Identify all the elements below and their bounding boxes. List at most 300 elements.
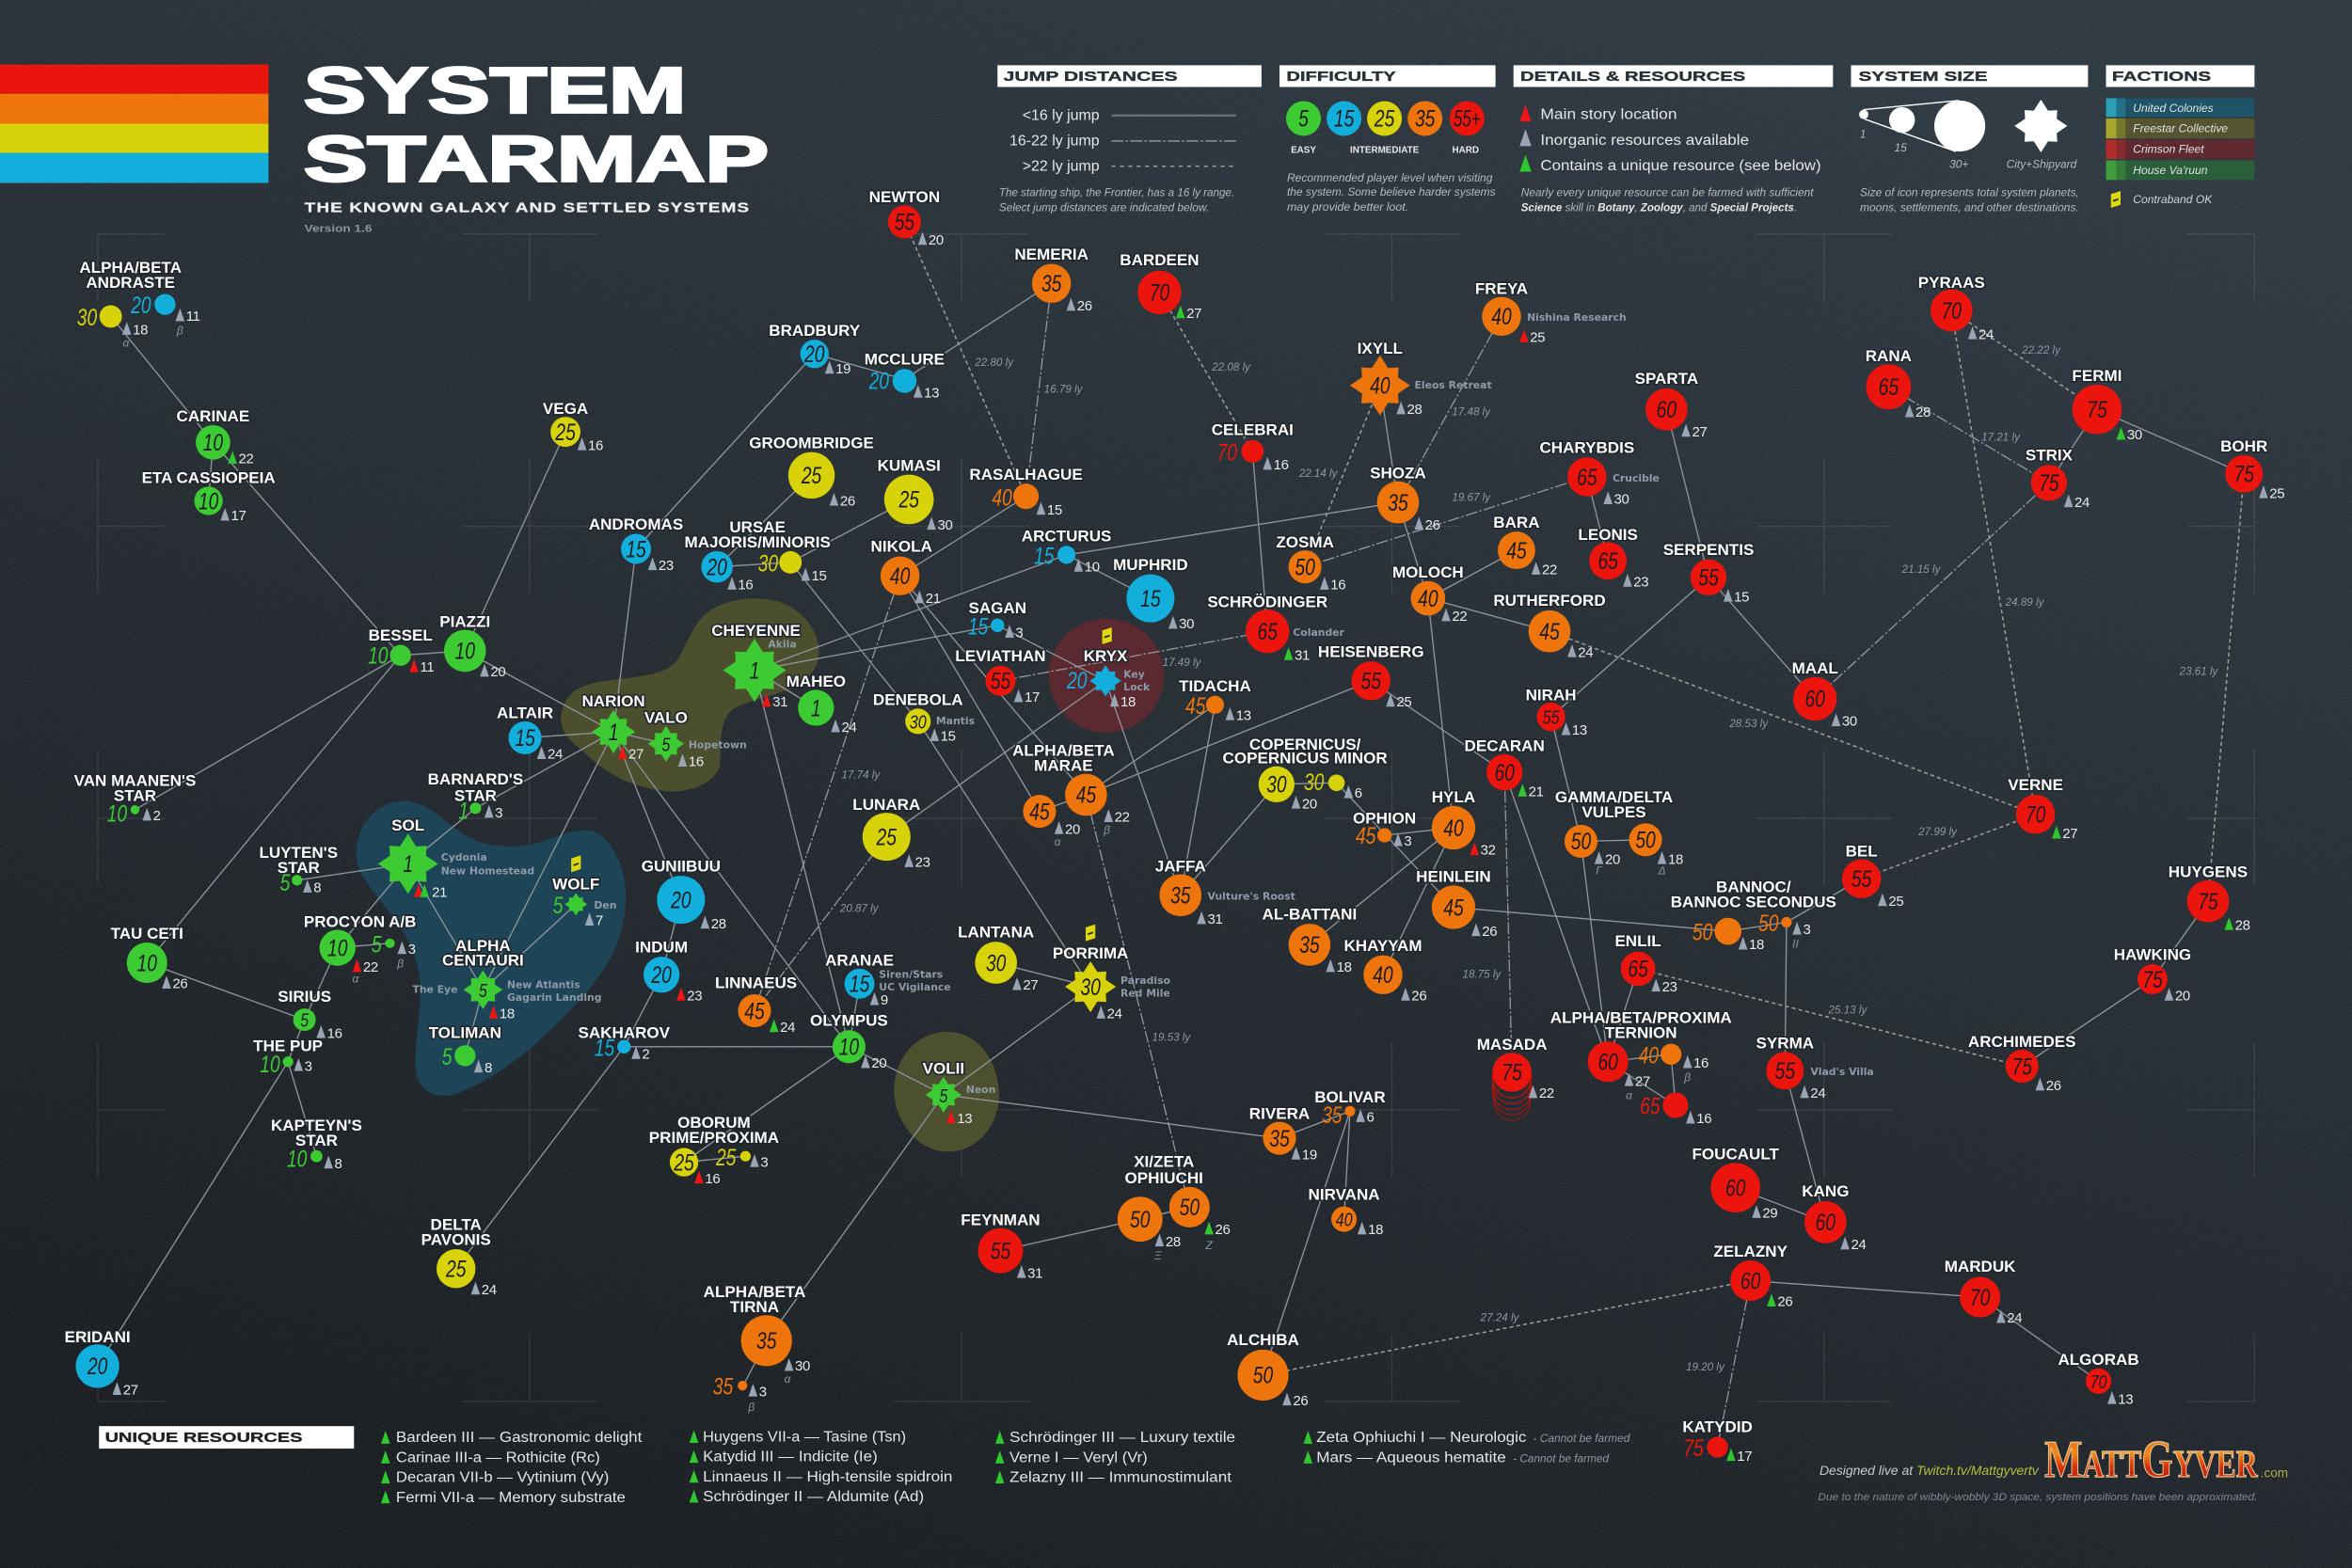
- system: Alpha/Beta/Proxima Ternion: 16: [1693, 1055, 1708, 1071]
- system: Cheyenne: 31: [772, 694, 787, 710]
- panel: unique resources: Schrödinger III — Luxury textile: [1009, 1430, 1235, 1446]
- system: Andromas: [589, 515, 683, 574]
- jump distance labels: 19.53 ly: [1152, 1031, 1191, 1043]
- system: Kapteyn's Star: 10: [287, 1146, 308, 1172]
- jump routes 16 to 22 ly: [755, 283, 2049, 1447]
- system: Alpha/Beta Tirna: TIRNA: [730, 1298, 779, 1316]
- system: Ursae Majoris/Minoris: MAJORIS/MINORIS: [684, 533, 831, 551]
- system: Decaran: [1465, 737, 1545, 800]
- system: Kumasi: 30: [937, 517, 953, 533]
- system: Hyla: HYLA: [1432, 788, 1475, 806]
- system: Tau Ceti: 26: [172, 976, 187, 992]
- system: Hawking: [2114, 945, 2191, 1004]
- system: Rivera: RIVERA: [1249, 1104, 1310, 1122]
- system: Bara: 45: [1506, 538, 1527, 563]
- system: Alpha/Beta Marae: MARAE: [1034, 756, 1093, 774]
- system: Alpha/Beta Tirna: α: [785, 1372, 792, 1386]
- system: Celebrai: 16: [1274, 457, 1289, 473]
- system: Linnaeus: 24: [780, 1020, 795, 1036]
- system: Shoza: SHOZA: [1370, 465, 1426, 483]
- system: Kang: 24: [1851, 1237, 1866, 1253]
- system: Shoza: 26: [1425, 517, 1440, 533]
- panel: jump distances: Select jump distances are indicated below.: [999, 201, 1209, 214]
- jump distance labels: 21.15 ly: [1901, 563, 1942, 576]
- panel: difficulty: EASY: [1291, 146, 1316, 156]
- system: Freya: FREYA: [1475, 279, 1528, 297]
- system: Kapteyn's Star: KAPTEYN'S: [271, 1117, 362, 1134]
- system: Bannoc/Bannoc Secondus: BANNOC/: [1716, 879, 1791, 896]
- system: Bradbury: BRADBURY: [769, 322, 861, 340]
- system: Heisenberg: [1318, 642, 1424, 710]
- system: Alpha Centauri: New Atlantis: [507, 979, 580, 991]
- system: Sirius: 16: [327, 1025, 342, 1041]
- system: The Pup: [253, 1037, 323, 1078]
- system: Serpentis: SERPENTIS: [1663, 541, 1754, 559]
- system: Delta Pavonis: PAVONIS: [421, 1230, 491, 1248]
- jump distance labels: 22.14 ly: [1298, 467, 1339, 480]
- system: Schrödinger: SCHRÖDINGER: [1207, 594, 1327, 611]
- system: Archimedes: ARCHIMEDES: [1968, 1033, 2076, 1051]
- system: Alpha/Beta Marae: ALPHA/BETA: [1012, 742, 1115, 760]
- system: Maheo: 1: [811, 695, 821, 721]
- panel: unique resources: Schrödinger II — Aldumite (Ad): [703, 1489, 924, 1505]
- system: Bradbury: 19: [835, 361, 850, 377]
- system: Nikola: [871, 538, 941, 607]
- system: Nirvana: 40: [1336, 1209, 1353, 1230]
- jump distance labels: 19.20 ly: [1686, 1361, 1725, 1373]
- system: Rana: RANA: [1866, 347, 1912, 365]
- system: Denebola: [873, 690, 975, 745]
- system: Valo: 5: [661, 734, 671, 755]
- system: McClure: 13: [924, 385, 939, 401]
- panel: difficulty: 25: [1374, 105, 1395, 132]
- system: Bolivar: 35: [1322, 1102, 1343, 1129]
- system: Xi/Zeta Ophiuchi: Ξ: [1153, 1249, 1163, 1262]
- system: Schrödinger: 65: [1258, 619, 1279, 645]
- system: Andromas: 15: [626, 536, 646, 562]
- panel: factions: [2106, 65, 2254, 208]
- system: Aranae: ARANAE: [825, 952, 894, 970]
- system: Pyraas: PYRAAS: [1918, 274, 1985, 292]
- system: Kang: 60: [1816, 1210, 1836, 1236]
- system: Huygens: 28: [2235, 917, 2250, 933]
- system: Indum: INDUM: [635, 938, 688, 956]
- system: Porrima: 24: [1107, 1006, 1122, 1022]
- system: Tau Ceti: [111, 925, 187, 992]
- system: Alpha/Beta/Proxima Ternion: 65: [1640, 1093, 1661, 1119]
- system: Archimedes: [1968, 1033, 2076, 1094]
- system: Ophion: 45: [1356, 822, 1376, 848]
- system: Xi/Zeta Ophiuchi: [1118, 1152, 1230, 1262]
- panel: details and resources: Inorganic resources available: [1540, 133, 1749, 149]
- system: Zosma: ZOSMA: [1276, 533, 1334, 551]
- system: Bel: 55: [1851, 866, 1872, 893]
- system: Olympus: 10: [839, 1034, 860, 1060]
- system: Sparta: 60: [1657, 397, 1677, 423]
- system: Ursae Majoris/Minoris: 16: [738, 578, 753, 594]
- panel: factions: United Colonies: [2133, 102, 2214, 115]
- system: Rasalhague: [969, 466, 1083, 518]
- system: Muphrid: 15: [1140, 586, 1161, 611]
- system: Van Maanen's Star: 2: [153, 808, 161, 824]
- system: Procyon A/B: 5: [372, 931, 382, 958]
- system: Newton: 20: [929, 232, 944, 248]
- system: Zelazny: [1713, 1243, 1792, 1310]
- system: Alpha/Beta Andraste: 18: [133, 323, 148, 339]
- jump distance labels: 22.08 ly: [1211, 361, 1251, 373]
- system: Alpha/Beta Andraste: β: [176, 325, 183, 338]
- system: Tau Ceti: TAU CETI: [111, 925, 183, 942]
- system: Narion: NARION: [581, 692, 645, 710]
- system: Huygens: HUYGENS: [2169, 863, 2248, 881]
- system: Kang: [1802, 1182, 1866, 1253]
- system: Lunara: 23: [915, 855, 930, 871]
- system: Groombridge: 25: [801, 463, 822, 489]
- system: Bannoc/Bannoc Secondus: 50: [1758, 911, 1779, 937]
- system: Van Maanen's Star: VAN MAANEN'S: [74, 771, 196, 789]
- system: Bessel: 11: [420, 659, 434, 675]
- system: Bel: [1842, 842, 1903, 910]
- system: Al-Battani: [1263, 905, 1357, 975]
- system: Gamma/Delta Vulpes: 18: [1668, 851, 1683, 867]
- system: Rivera: 19: [1302, 1147, 1317, 1163]
- system: Toliman: 5: [442, 1044, 453, 1070]
- panel: unique resources: Huygens VII-a — Tasine (Tsn): [703, 1430, 906, 1446]
- system: Groombridge: [749, 435, 874, 509]
- panel: details and resources: Contains a unique resource (see below): [1540, 158, 1821, 174]
- system: Sol: [378, 816, 534, 900]
- panel: unique resources: Zeta Ophiuchi I — Neurologic: [1316, 1430, 1526, 1446]
- system: Bara: 22: [1542, 562, 1557, 578]
- system: The Pup: THE PUP: [253, 1037, 323, 1055]
- system: Luyten's Star: LUYTEN'S: [259, 844, 338, 862]
- system: Lunara: [852, 796, 930, 871]
- system: Charybdis: CHARYBDIS: [1540, 438, 1634, 456]
- system: Serpentis: [1663, 541, 1754, 605]
- system: Groombridge: GROOMBRIDGE: [749, 435, 874, 452]
- system: Bohr: BOHR: [2220, 437, 2267, 455]
- system: Nirah: 55: [1543, 706, 1560, 728]
- system: Lantana: [958, 923, 1038, 993]
- system: Tidacha: TIDACHA: [1179, 677, 1251, 695]
- system: Leonis: 23: [1633, 574, 1648, 590]
- jump distance labels: 16.79 ly: [1044, 384, 1084, 396]
- system: Muphrid: [1113, 556, 1194, 632]
- jump distance labels: 27.99 ly: [1917, 826, 1958, 838]
- system: Sakharov: SAKHAROV: [578, 1023, 671, 1041]
- jump distance labels: 22.80 ly: [974, 356, 1014, 369]
- system: Eta Cassiopeia: 10: [199, 488, 219, 515]
- panel: system size: 30+: [1949, 158, 1968, 171]
- system: Bessel: [368, 626, 434, 675]
- system: Syrma: SYRMA: [1756, 1034, 1814, 1052]
- system: Enlil: [1614, 932, 1677, 995]
- system: Aranae: Siren/Stars: [879, 968, 943, 980]
- panel: unique resources: UNIQUE RESOURCES: [105, 1431, 303, 1446]
- system: Schrödinger: Colander: [1293, 626, 1345, 639]
- system: Algorab: [2058, 1351, 2139, 1407]
- system: Feynman: FEYNMAN: [961, 1212, 1041, 1229]
- system: Oborum Prime/Proxima: 25: [673, 1149, 694, 1176]
- panel: system size: 1: [1860, 128, 1867, 141]
- system: Alpha/Beta/Proxima Ternion: 40: [1639, 1042, 1660, 1069]
- system: Piazzi: PIAZZI: [439, 612, 490, 630]
- system: Bara: [1493, 514, 1557, 578]
- system: Rasalhague: RASALHAGUE: [969, 466, 1083, 483]
- system: Narion: 27: [628, 747, 644, 763]
- system: Kryx: [1066, 627, 1151, 710]
- system: Alpha/Beta Marae: 20: [1065, 821, 1080, 837]
- system: Muphrid: 30: [1179, 616, 1194, 632]
- system: Freya: Nishina Research: [1527, 311, 1627, 324]
- system: Nirah: NIRAH: [1526, 687, 1577, 705]
- system: Guniibuu: 20: [670, 887, 691, 913]
- system: Nemeria: 26: [1077, 298, 1092, 314]
- system: Kapteyn's Star: STAR: [295, 1132, 338, 1149]
- system: Alpha/Beta Andraste: 20: [130, 293, 151, 319]
- system: Copernicus/Copernicus Minor: 30: [1266, 771, 1287, 798]
- system: Aranae: UC Vigilance: [879, 981, 951, 993]
- system: Kapteyn's Star: [271, 1117, 362, 1172]
- system: Sol: 1: [403, 851, 413, 878]
- system: Arcturus: 10: [1085, 559, 1100, 575]
- system: Oborum Prime/Proxima: 16: [705, 1171, 720, 1187]
- system: Piazzi: 10: [455, 638, 476, 664]
- system: Altair: 15: [515, 725, 535, 752]
- system: Algorab: 13: [2118, 1391, 2133, 1407]
- system: Xi/Zeta Ophiuchi: 50: [1180, 1195, 1200, 1221]
- system: Al-Battani: 18: [1337, 959, 1352, 975]
- system: Luyten's Star: 5: [280, 870, 291, 896]
- system: Ursae Majoris/Minoris: 30: [758, 550, 779, 577]
- system: Hawking: 20: [2175, 988, 2190, 1004]
- system: Strix: 24: [2074, 495, 2090, 511]
- system: Guniibuu: [642, 857, 726, 932]
- system: Ophion: [1353, 809, 1416, 849]
- system: Gamma/Delta Vulpes: Γ: [1596, 863, 1603, 877]
- system: Sirius: [278, 988, 342, 1041]
- system: Alpha/Beta Marae: 45: [1029, 799, 1050, 825]
- panel: factions: Crimson Fleet: [2133, 143, 2204, 156]
- system: Bannoc/Bannoc Secondus: 18: [1749, 937, 1764, 953]
- system: Strix: STRIX: [2026, 446, 2074, 464]
- system: Olympus: OLYMPUS: [810, 1012, 888, 1030]
- system: Porrima: Red Mile: [1120, 987, 1170, 999]
- system: Alpha Centauri: 18: [500, 1006, 515, 1022]
- system: Gamma/Delta Vulpes: 50: [1635, 827, 1656, 853]
- system: Moloch: 40: [1418, 586, 1438, 611]
- panel: details and resources: DETAILS & RESOURCES: [1520, 70, 1746, 85]
- system: Sagan: 3: [1015, 626, 1023, 641]
- system: Alpha/Beta/Proxima Ternion: ALPHA/BETA/PROXIMA: [1550, 1008, 1732, 1026]
- jump distance labels: 20.87 ly: [839, 902, 880, 914]
- system: Alpha Centauri: ALPHA: [455, 937, 511, 955]
- system: Tidacha: [1179, 677, 1251, 723]
- system: Gamma/Delta Vulpes: 50: [1571, 829, 1592, 855]
- system: Gamma/Delta Vulpes: Δ: [1658, 863, 1666, 877]
- system: Ursae Majoris/Minoris: URSAE: [729, 518, 786, 536]
- system: Alpha/Beta/Proxima Ternion: 60: [1597, 1049, 1618, 1075]
- system: Bannoc/Bannoc Secondus: 50: [1692, 919, 1713, 945]
- system: Rana: 65: [1879, 374, 1899, 401]
- system: Eridani: 20: [87, 1354, 108, 1380]
- system: Sol: 21: [432, 884, 447, 900]
- system: Alpha/Beta Andraste: [77, 259, 200, 349]
- panel: unique resources: Fermi VII-a — Memory substrate: [396, 1490, 626, 1506]
- system: Newton: NEWTON: [869, 188, 940, 206]
- system: Sagan: 15: [968, 613, 989, 640]
- system: Kryx: Key: [1123, 669, 1145, 681]
- system: Rana: 28: [1915, 404, 1931, 420]
- system: Alpha/Beta Tirna: 30: [795, 1358, 810, 1374]
- panel: details and resources: Main story location: [1540, 107, 1677, 123]
- system: Rasalhague: 40: [992, 484, 1012, 511]
- panel: unique resources: Verne I — Veryl (Vr): [1009, 1449, 1148, 1465]
- faction territory: Freestar Collective, Volii: [894, 1032, 999, 1151]
- system: Alpha Centauri: CENTAURI: [442, 952, 524, 970]
- system: Lunara: 25: [876, 824, 898, 850]
- system: Gamma/Delta Vulpes: GAMMA/DELTA: [1555, 788, 1673, 806]
- system: Huygens: 75: [2198, 889, 2218, 915]
- system: Celebrai: CELEBRAI: [1212, 420, 1294, 438]
- system: Charybdis: 65: [1577, 464, 1597, 490]
- system: Zelazny: 26: [1777, 1294, 1792, 1310]
- system: Barnard's Star: BARNARD'S: [428, 770, 523, 788]
- system: Al-Battani: 35: [1299, 932, 1320, 958]
- jump distance labels: 28.53 ly: [1728, 718, 1769, 730]
- system: Zosma: 50: [1295, 554, 1315, 580]
- system: Cheyenne: [711, 622, 801, 710]
- system: Wolf: 5: [553, 893, 564, 919]
- system: Volii: 13: [957, 1111, 972, 1127]
- system: Alpha/Beta Marae: [1012, 742, 1130, 848]
- system: Copernicus/Copernicus Minor: 6: [1355, 785, 1362, 801]
- system: Denebola: Mantis: [936, 715, 975, 727]
- panel: jump distances: >22 ly jump: [1023, 159, 1100, 175]
- system: Barnard's Star: 1: [458, 798, 469, 824]
- system: Al-Battani: AL-BATTANI: [1263, 905, 1357, 923]
- system: Delta Pavonis: DELTA: [431, 1215, 482, 1233]
- system: Katydid: [1682, 1418, 1753, 1465]
- panel: jump distances: 16-22 ly jump: [1009, 134, 1100, 150]
- system: Eridani: 27: [123, 1383, 138, 1399]
- system: Vega: 25: [554, 420, 576, 446]
- title: STARMAP: [304, 123, 769, 196]
- system: Indum: 20: [651, 962, 672, 989]
- system: Carinae: CARINAE: [177, 407, 249, 425]
- system: Van Maanen's Star: [74, 771, 196, 827]
- system: Strix: [2026, 446, 2090, 511]
- system: Copernicus/Copernicus Minor: COPERNICUS MINOR: [1223, 749, 1388, 767]
- system: Syrma: Vlad's Villa: [1810, 1066, 1874, 1078]
- system: Olympus: [810, 1012, 888, 1071]
- logo: MattGyver: MATTGYVER: [2044, 1431, 2258, 1489]
- panel: details and resources: [1514, 65, 1833, 214]
- system: Vega: 16: [588, 437, 603, 453]
- system: Bannoc/Bannoc Secondus: II: [1792, 938, 1799, 951]
- system: Sakharov: 2: [642, 1047, 649, 1063]
- system: Guniibuu: GUNIIBUU: [642, 857, 721, 875]
- system: Fermi: 75: [2087, 397, 2107, 423]
- panel: details and resources: Science skill in Botany, Zoology, and Special Projects.: [1521, 201, 1797, 214]
- system: Bolivar: BOLIVAR: [1314, 1088, 1386, 1106]
- system: Heisenberg: HEISENBERG: [1318, 642, 1424, 660]
- system: Zosma: 16: [1330, 578, 1345, 594]
- system: Procyon A/B: 3: [408, 942, 416, 958]
- system: Huygens: [2169, 863, 2250, 933]
- system: Charybdis: 30: [1614, 492, 1629, 508]
- system: Zosma: [1276, 533, 1345, 594]
- system: McClure: MCCLURE: [865, 350, 945, 368]
- system: Enlil: 23: [1662, 979, 1677, 995]
- logo suffix: .com: [2261, 1465, 2288, 1480]
- system: Ursae Majoris/Minoris: 15: [812, 568, 827, 584]
- system: Arcturus: [1022, 528, 1111, 575]
- system: Wolf: 7: [596, 913, 603, 929]
- system: Sagan: SAGAN: [968, 599, 1026, 617]
- panel: difficulty: DIFFICULTY: [1286, 70, 1396, 85]
- system: Marduk: MARDUK: [1945, 1258, 2016, 1275]
- system: Feynman: [961, 1212, 1042, 1281]
- system: Archimedes: 26: [2046, 1078, 2061, 1094]
- system: Freya: [1475, 279, 1627, 346]
- system: Nirvana: NIRVANA: [1309, 1185, 1380, 1203]
- panel: factions: Freestar Collective: [2133, 122, 2228, 135]
- system: Celebrai: 70: [1216, 439, 1238, 466]
- system: Copernicus/Copernicus Minor: COPERNICUS/: [1249, 736, 1361, 753]
- system: Nemeria: 35: [1041, 271, 1062, 297]
- system: Pyraas: 70: [1942, 297, 1963, 324]
- system: Arcturus: 15: [1034, 543, 1055, 569]
- system: Procyon A/B: 22: [363, 959, 378, 975]
- system: Pyraas: [1918, 274, 1994, 342]
- system: Oborum Prime/Proxima: [649, 1114, 779, 1187]
- system: Masada: 22: [1539, 1085, 1554, 1101]
- system: Verne: [2008, 776, 2077, 842]
- system: Cheyenne: Akila: [768, 639, 797, 651]
- system: Cheyenne: 1: [750, 657, 759, 684]
- system: Indum: 23: [687, 988, 702, 1004]
- system: Zelazny: ZELAZNY: [1713, 1243, 1788, 1260]
- system: Bolivar: [1314, 1088, 1386, 1129]
- system: Narion: [581, 692, 645, 763]
- system: Moloch: MOLOCH: [1392, 563, 1464, 581]
- system: Alchiba: 50: [1253, 1362, 1274, 1388]
- system: Ixyll: [1350, 340, 1492, 418]
- system: Bradbury: [769, 322, 861, 377]
- system: Linnaeus: 45: [744, 998, 765, 1024]
- system: Groombridge: 26: [840, 493, 855, 509]
- system: Toliman: [429, 1023, 501, 1076]
- panel: factions: Contraband OK: [2133, 193, 2213, 206]
- system: Khayyam: 40: [1373, 962, 1393, 989]
- credit line: Designed live at Twitch.tv/Mattgyvertv: [1820, 1464, 2040, 1478]
- system: Procyon A/B: α: [352, 972, 359, 985]
- system: Kapteyn's Star: 8: [335, 1156, 342, 1172]
- system: Volii: [923, 1060, 995, 1127]
- system: Xi/Zeta Ophiuchi: OPHIUCHI: [1125, 1169, 1203, 1187]
- system: Heinlein: 26: [1482, 924, 1497, 940]
- system: Leviathan: [955, 647, 1046, 705]
- system: Xi/Zeta Ophiuchi: XI/ZETA: [1134, 1152, 1194, 1170]
- system: Luyten's Star: STAR: [278, 859, 320, 877]
- system: Foucault: 29: [1762, 1206, 1777, 1222]
- system: Fermi: FERMI: [2072, 367, 2122, 385]
- system: Khayyam: [1343, 937, 1426, 1004]
- system: Carinae: 22: [239, 451, 254, 467]
- system: Ophion: 3: [1404, 833, 1411, 849]
- system: Lantana: 30: [986, 950, 1007, 976]
